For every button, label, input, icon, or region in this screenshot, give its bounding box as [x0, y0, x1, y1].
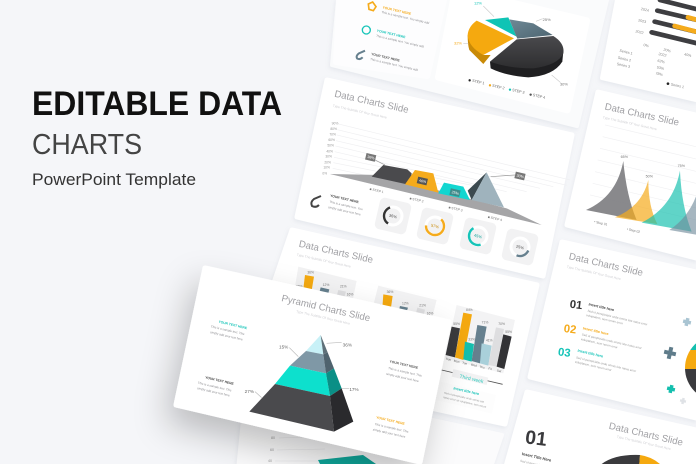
- axis labels and grid: 60: [270, 448, 274, 452]
- peak: orange: [615, 180, 657, 224]
- small bar chart 1: 21%: [340, 285, 347, 289]
- slide: numbered list: [530, 242, 696, 418]
- pie legend: [468, 79, 546, 100]
- tile: teal donut: [459, 217, 497, 255]
- layer: dark: [249, 384, 353, 432]
- tile: slate donut: 25%: [516, 244, 525, 250]
- peak: teal: [642, 171, 692, 232]
- title: Data Charts Slide: [333, 89, 410, 116]
- step legend: [369, 187, 502, 222]
- text block: simply add your text here: [328, 205, 361, 217]
- pie labels: 25%: [543, 17, 551, 22]
- pie labels: 30%: [560, 82, 568, 87]
- weekly column chart: 41%: [486, 339, 493, 343]
- value tags: 46%: [419, 179, 427, 184]
- pie labels: 12%: [474, 0, 482, 5]
- tile: dark donut: 36%: [389, 213, 398, 219]
- pie: dark slice: [490, 36, 564, 77]
- trapezoid: cyan: [438, 183, 470, 200]
- step legend: ■ STEP 3: [448, 205, 463, 213]
- text: dark item: YOUR TEXT HERE: [371, 52, 401, 63]
- axis grid and labels: 30%: [325, 155, 332, 159]
- title: Type The Subtitle Of Your Great Here: [616, 435, 671, 451]
- area chart peaks: [586, 155, 696, 235]
- pie: teal slice: [485, 17, 517, 37]
- donut pie: [602, 455, 660, 464]
- text block: orange: simply add your text here: [372, 427, 406, 439]
- layer: slate: [290, 351, 334, 373]
- text block: teal: This is a sample text. This: [210, 324, 245, 336]
- small bar chart 1: 16%: [347, 293, 353, 297]
- peak labels: 50%: [646, 174, 654, 178]
- weekly column chart: Mon: [453, 359, 460, 364]
- table text: [616, 7, 692, 89]
- table text: 0%: [643, 43, 650, 48]
- text block: dark: This is a sample text. This: [197, 381, 232, 392]
- title: Pyramid Charts Slide: [280, 293, 371, 324]
- small bar chart 1: 36%: [296, 285, 303, 289]
- weekly column chart: 33%: [468, 337, 475, 341]
- axis grid and labels: 40%: [326, 149, 333, 153]
- text block: orange: YOUR TEXT HERE: [376, 415, 406, 426]
- title: Type The Subtitle Of Your Great Here: [602, 115, 657, 131]
- pie legend: STEP 2: [492, 84, 505, 90]
- text: orange item: This is a sample text. You simply add: [381, 10, 430, 25]
- big number: Insert Title Here: [521, 451, 553, 463]
- text block: right: [386, 359, 423, 383]
- pie: orange slice: [468, 21, 514, 64]
- weekly column chart: Sun: [445, 357, 452, 362]
- item 02: voluptatem, sem rerum error: [580, 337, 618, 349]
- pie labels: 32%: [454, 40, 462, 45]
- table text: Series 1: [670, 82, 684, 89]
- title: Type The Subtitle Of Your Great Here: [296, 253, 351, 269]
- icon: orange badge: [368, 2, 376, 11]
- item 03: 03: [557, 346, 571, 360]
- item 02: [563, 323, 642, 350]
- big number: [520, 427, 553, 464]
- percentage labels: 15%: [279, 345, 288, 350]
- small bar chart 2: 36%: [375, 303, 381, 307]
- pyramid: [245, 335, 359, 432]
- pie: slate slice: [509, 19, 553, 39]
- text block: orange: [372, 415, 409, 439]
- insert title card: Insert title here: [453, 386, 480, 396]
- pie legend: STEP 4: [532, 93, 546, 100]
- small bar chart 1: 12%: [323, 283, 329, 287]
- big number: 01: [524, 427, 548, 451]
- small bar chart 2: 36%: [387, 290, 393, 294]
- icon: teal coin: [362, 26, 370, 34]
- item 03: Sed ut perspiciatis unde omnis iste natus error: [576, 355, 636, 373]
- axis grid and labels: 50%: [327, 144, 334, 148]
- title: Type The Subtitle Of Your Great Here: [566, 265, 621, 281]
- layer: light top: [306, 335, 328, 354]
- text: teal item: YOUR TEXT HERE: [376, 29, 407, 39]
- pie legend: STEP 3: [512, 88, 525, 95]
- text block: teal: simply add your text here: [210, 330, 243, 342]
- floor: [330, 174, 542, 225]
- slide: top right bar table: [602, 0, 696, 100]
- bars: [652, 0, 696, 44]
- title: Data Charts Slide: [608, 421, 684, 449]
- axis labels and grid: 80: [271, 436, 275, 440]
- pie legend: STEP 1: [472, 79, 485, 85]
- item 02: Sed ut perspiciatis unde omnis iste natus error: [581, 332, 642, 350]
- third week arrow: Third week: [459, 374, 484, 385]
- icon: plus signs: [663, 317, 692, 405]
- peak: grey: [586, 161, 637, 220]
- small bar chart 2: 12%: [402, 301, 409, 305]
- table text: 20%: [663, 48, 672, 53]
- insert title card: Sed ut perspiciatis unde omnis iste: [444, 391, 485, 404]
- table text: 62%: [657, 59, 666, 64]
- percentage labels: 17%: [349, 387, 359, 392]
- slide: bottom right donut: [505, 392, 696, 464]
- axis grid and labels: [322, 121, 570, 192]
- item 02: Insert title here: [582, 326, 609, 336]
- table text: 2023: [638, 18, 647, 24]
- weekly column chart: 70%: [498, 322, 505, 326]
- slide: pyramid chart (front): [176, 268, 449, 462]
- axis grid and labels: 0%: [322, 171, 327, 175]
- tile: teal donut: 45%: [474, 233, 483, 239]
- axis grid and labels: 70%: [329, 133, 336, 137]
- table text: 2024: [640, 7, 649, 13]
- table text: 78%: [655, 71, 664, 77]
- subheading: PowerPoint Template: [32, 171, 196, 189]
- peak labels: 75%: [678, 164, 686, 168]
- item 01: voluptatem, sem rerum error: [586, 313, 623, 325]
- pie chart: [685, 344, 696, 392]
- item 01: Sed ut perspiciatis unde omnis iste natus error: [587, 309, 648, 326]
- small bar chart 2: 21%: [419, 303, 426, 307]
- text block: YOUR TEXT HERE: [330, 194, 360, 204]
- step labels: [594, 220, 641, 234]
- item 02: 02: [563, 323, 577, 337]
- weekly column chart: Fri: [488, 366, 493, 371]
- panel: legend list: [336, 0, 444, 76]
- insert title card: [436, 382, 496, 414]
- text block: dark: simply add your text here: [197, 386, 230, 398]
- title: Data Charts Slide: [298, 239, 374, 266]
- item 01: [569, 299, 648, 326]
- text block: right: This is a sample text. This: [388, 366, 423, 378]
- table text: Series 2: [617, 56, 631, 63]
- tile: dark donut: [374, 197, 412, 235]
- text: teal item: This is a sample text. You simply add: [376, 34, 425, 49]
- slide: top pie chart: [332, 0, 607, 126]
- weekly column chart: Sat: [496, 368, 502, 373]
- text block: This is a sample text. You: [329, 200, 363, 211]
- weekly column chart: 84%: [466, 308, 473, 312]
- peak labels: [621, 155, 686, 178]
- weekly column chart: 55%: [453, 322, 460, 326]
- axis grid and labels: 60%: [328, 138, 335, 142]
- panel: 3D pie card: [438, 0, 587, 110]
- value tags: 25%: [451, 190, 460, 196]
- percentage labels: 36%: [343, 342, 352, 347]
- teal column top: [318, 455, 376, 464]
- icon: magnet: [311, 196, 321, 207]
- table text: Series 3: [616, 62, 630, 69]
- item 01: Insert title here: [588, 302, 615, 312]
- axis grid and labels: 20%: [324, 160, 331, 164]
- step labels: • Step 02: [626, 227, 641, 234]
- text: dark item: This is a sample text. You simply add: [370, 57, 419, 72]
- table text: 40%: [684, 52, 692, 58]
- item 03: voluptatem, sem rerum error: [574, 360, 612, 372]
- heading: editable data: EDITABLE DATA: [32, 85, 282, 123]
- step labels: • Step 01: [594, 220, 608, 227]
- trapezoid: dark: [372, 165, 412, 185]
- percentage labels: [245, 342, 359, 398]
- donut tiles: [374, 197, 539, 266]
- tile: slate donut: [501, 228, 539, 266]
- title: Data Charts Slide: [604, 102, 680, 129]
- item 03: [557, 346, 636, 373]
- item 01: 01: [569, 299, 583, 312]
- text block: teal: [210, 320, 248, 342]
- heading: charts: CHARTS: [32, 129, 142, 161]
- small bar chart 1: 36%: [307, 271, 314, 275]
- slide: trapezoid data chart: [297, 80, 572, 276]
- weekly column chart: Wed: [470, 362, 478, 368]
- axis labels and grid: [268, 436, 330, 463]
- step legend: ■ STEP 1: [369, 187, 384, 194]
- title: Type The Subtitle Of Your Great Here: [332, 104, 387, 120]
- axis grid and labels: 80%: [330, 127, 337, 131]
- tile: orange donut: [416, 207, 454, 245]
- text block: right: YOUR TEXT HERE: [389, 359, 419, 370]
- axis labels and grid: 40: [268, 459, 272, 463]
- tile: orange donut: 57%: [431, 223, 440, 229]
- value tags: 30%: [516, 174, 525, 179]
- text block: dark: [197, 375, 235, 398]
- insert title card: natus error sit voluptatem, sem rerum: [443, 395, 487, 409]
- weekly column chart: [445, 305, 515, 373]
- step legend: ■ STEP 4: [487, 215, 502, 222]
- text: orange item: YOUR TEXT HERE: [382, 5, 412, 16]
- trapezoid: orange: [405, 170, 438, 193]
- third week arrow: [442, 369, 503, 385]
- peak labels: 65%: [621, 155, 629, 159]
- value tags: 36%: [367, 155, 376, 161]
- layer: teal: [275, 366, 342, 396]
- title: Type The Subtitle Of Your Great Here: [296, 309, 351, 326]
- item 03: Insert title here: [577, 349, 604, 359]
- text block: right: simply add your text here: [386, 372, 419, 383]
- weekly column chart: Thu: [479, 365, 485, 370]
- axis grid and labels: 90%: [332, 121, 338, 125]
- slide: area chart: [567, 92, 696, 258]
- text block: teal: YOUR TEXT HERE: [218, 320, 248, 330]
- step legend: ■ STEP 2: [409, 196, 424, 204]
- weekly column chart: 55%: [505, 330, 512, 334]
- text block: [328, 194, 363, 217]
- percentage labels: 27%: [245, 389, 254, 394]
- weekly column chart: 71%: [482, 320, 488, 324]
- trapezoid chart: [328, 153, 542, 225]
- table text: 2022: [635, 29, 644, 35]
- title: Data Charts Slide: [568, 251, 644, 279]
- small bar chart 2: 16%: [427, 311, 433, 315]
- triangle: slate: [468, 172, 504, 207]
- grid lines: [590, 125, 696, 220]
- weekly column chart: Tue: [462, 361, 468, 366]
- table text: 2022: [658, 52, 667, 58]
- table text: Series 1: [619, 49, 633, 56]
- table text: 53%: [656, 65, 665, 71]
- axis grid and labels: 10%: [323, 166, 330, 170]
- value tags: [365, 153, 526, 197]
- text block: orange: This is a sample text. This: [374, 422, 409, 434]
- icon: magnet: [357, 51, 365, 59]
- slide: bottom column chart: [238, 380, 502, 464]
- text block: dark: YOUR TEXT HERE: [205, 375, 235, 386]
- peak: slate: [669, 190, 696, 235]
- pie labels: [454, 0, 568, 87]
- small bar chart 1: [295, 267, 357, 301]
- slide: bar charts: [245, 230, 537, 424]
- small bar chart 2: [373, 286, 437, 320]
